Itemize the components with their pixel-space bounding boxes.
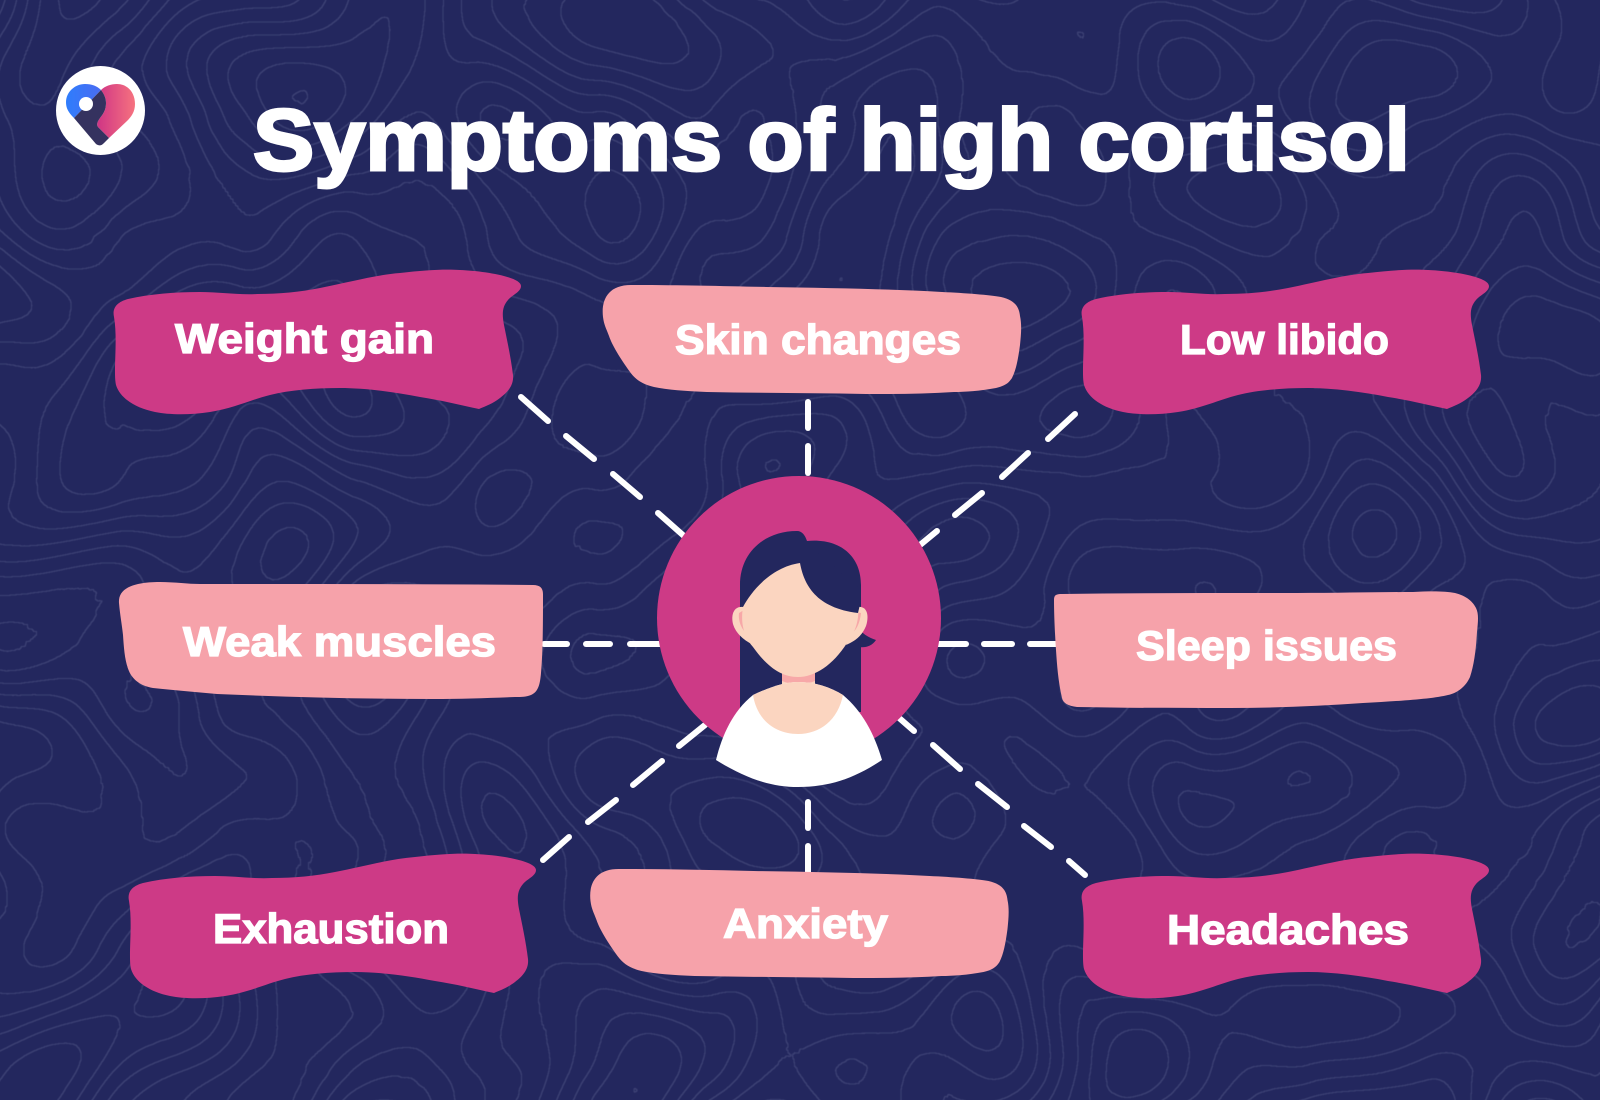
face: [742, 560, 858, 677]
logo: heart pin badge: [56, 66, 145, 155]
panel: Exhaustion: [129, 854, 536, 998]
left inner ear: [739, 610, 748, 635]
dashed connector: Sleep issues: [938, 641, 1056, 647]
dashed connector: Weak muscles: [544, 641, 660, 647]
hair tip: [858, 630, 876, 647]
label: Headaches: [1167, 906, 1409, 953]
fringe: [800, 550, 861, 613]
label: Skin changes: [675, 316, 961, 363]
panel: Skin changes: [603, 285, 1021, 394]
label: Exhaustion: [213, 905, 449, 952]
right ear: [846, 607, 867, 645]
label: Weight gain: [175, 315, 434, 362]
panel: Headaches: [1082, 854, 1489, 998]
circle backdrop: [657, 476, 941, 760]
neck: [782, 668, 815, 700]
white top: [716, 682, 882, 787]
panel: Weak muscles: [119, 582, 543, 699]
central illustration: woman in circle: [657, 476, 941, 787]
dashed connector: Weight gain: [521, 397, 684, 536]
dashed connector: Headaches: [898, 717, 1085, 875]
dashed connector: Low libido: [920, 414, 1075, 545]
panel: Weight gain: [114, 270, 521, 414]
left ear: [732, 607, 753, 645]
dashed connector: Skin changes: [805, 402, 811, 473]
neck shadow: [782, 672, 815, 684]
title: Symptoms of high cortisol: [253, 92, 1410, 189]
label: Low libido: [1180, 316, 1389, 363]
hair: [740, 531, 861, 712]
right inner ear: [851, 612, 861, 634]
dashed connector: Exhaustion: [543, 725, 705, 860]
label: Weak muscles: [183, 618, 496, 665]
panel: Low libido: [1082, 270, 1489, 414]
neckline: [753, 682, 843, 734]
panel: Anxiety: [590, 869, 1009, 978]
dashed connector: Anxiety: [805, 802, 811, 876]
label: Anxiety: [723, 900, 889, 947]
panel: Sleep issues: [1054, 591, 1478, 708]
label: Sleep issues: [1136, 622, 1397, 669]
